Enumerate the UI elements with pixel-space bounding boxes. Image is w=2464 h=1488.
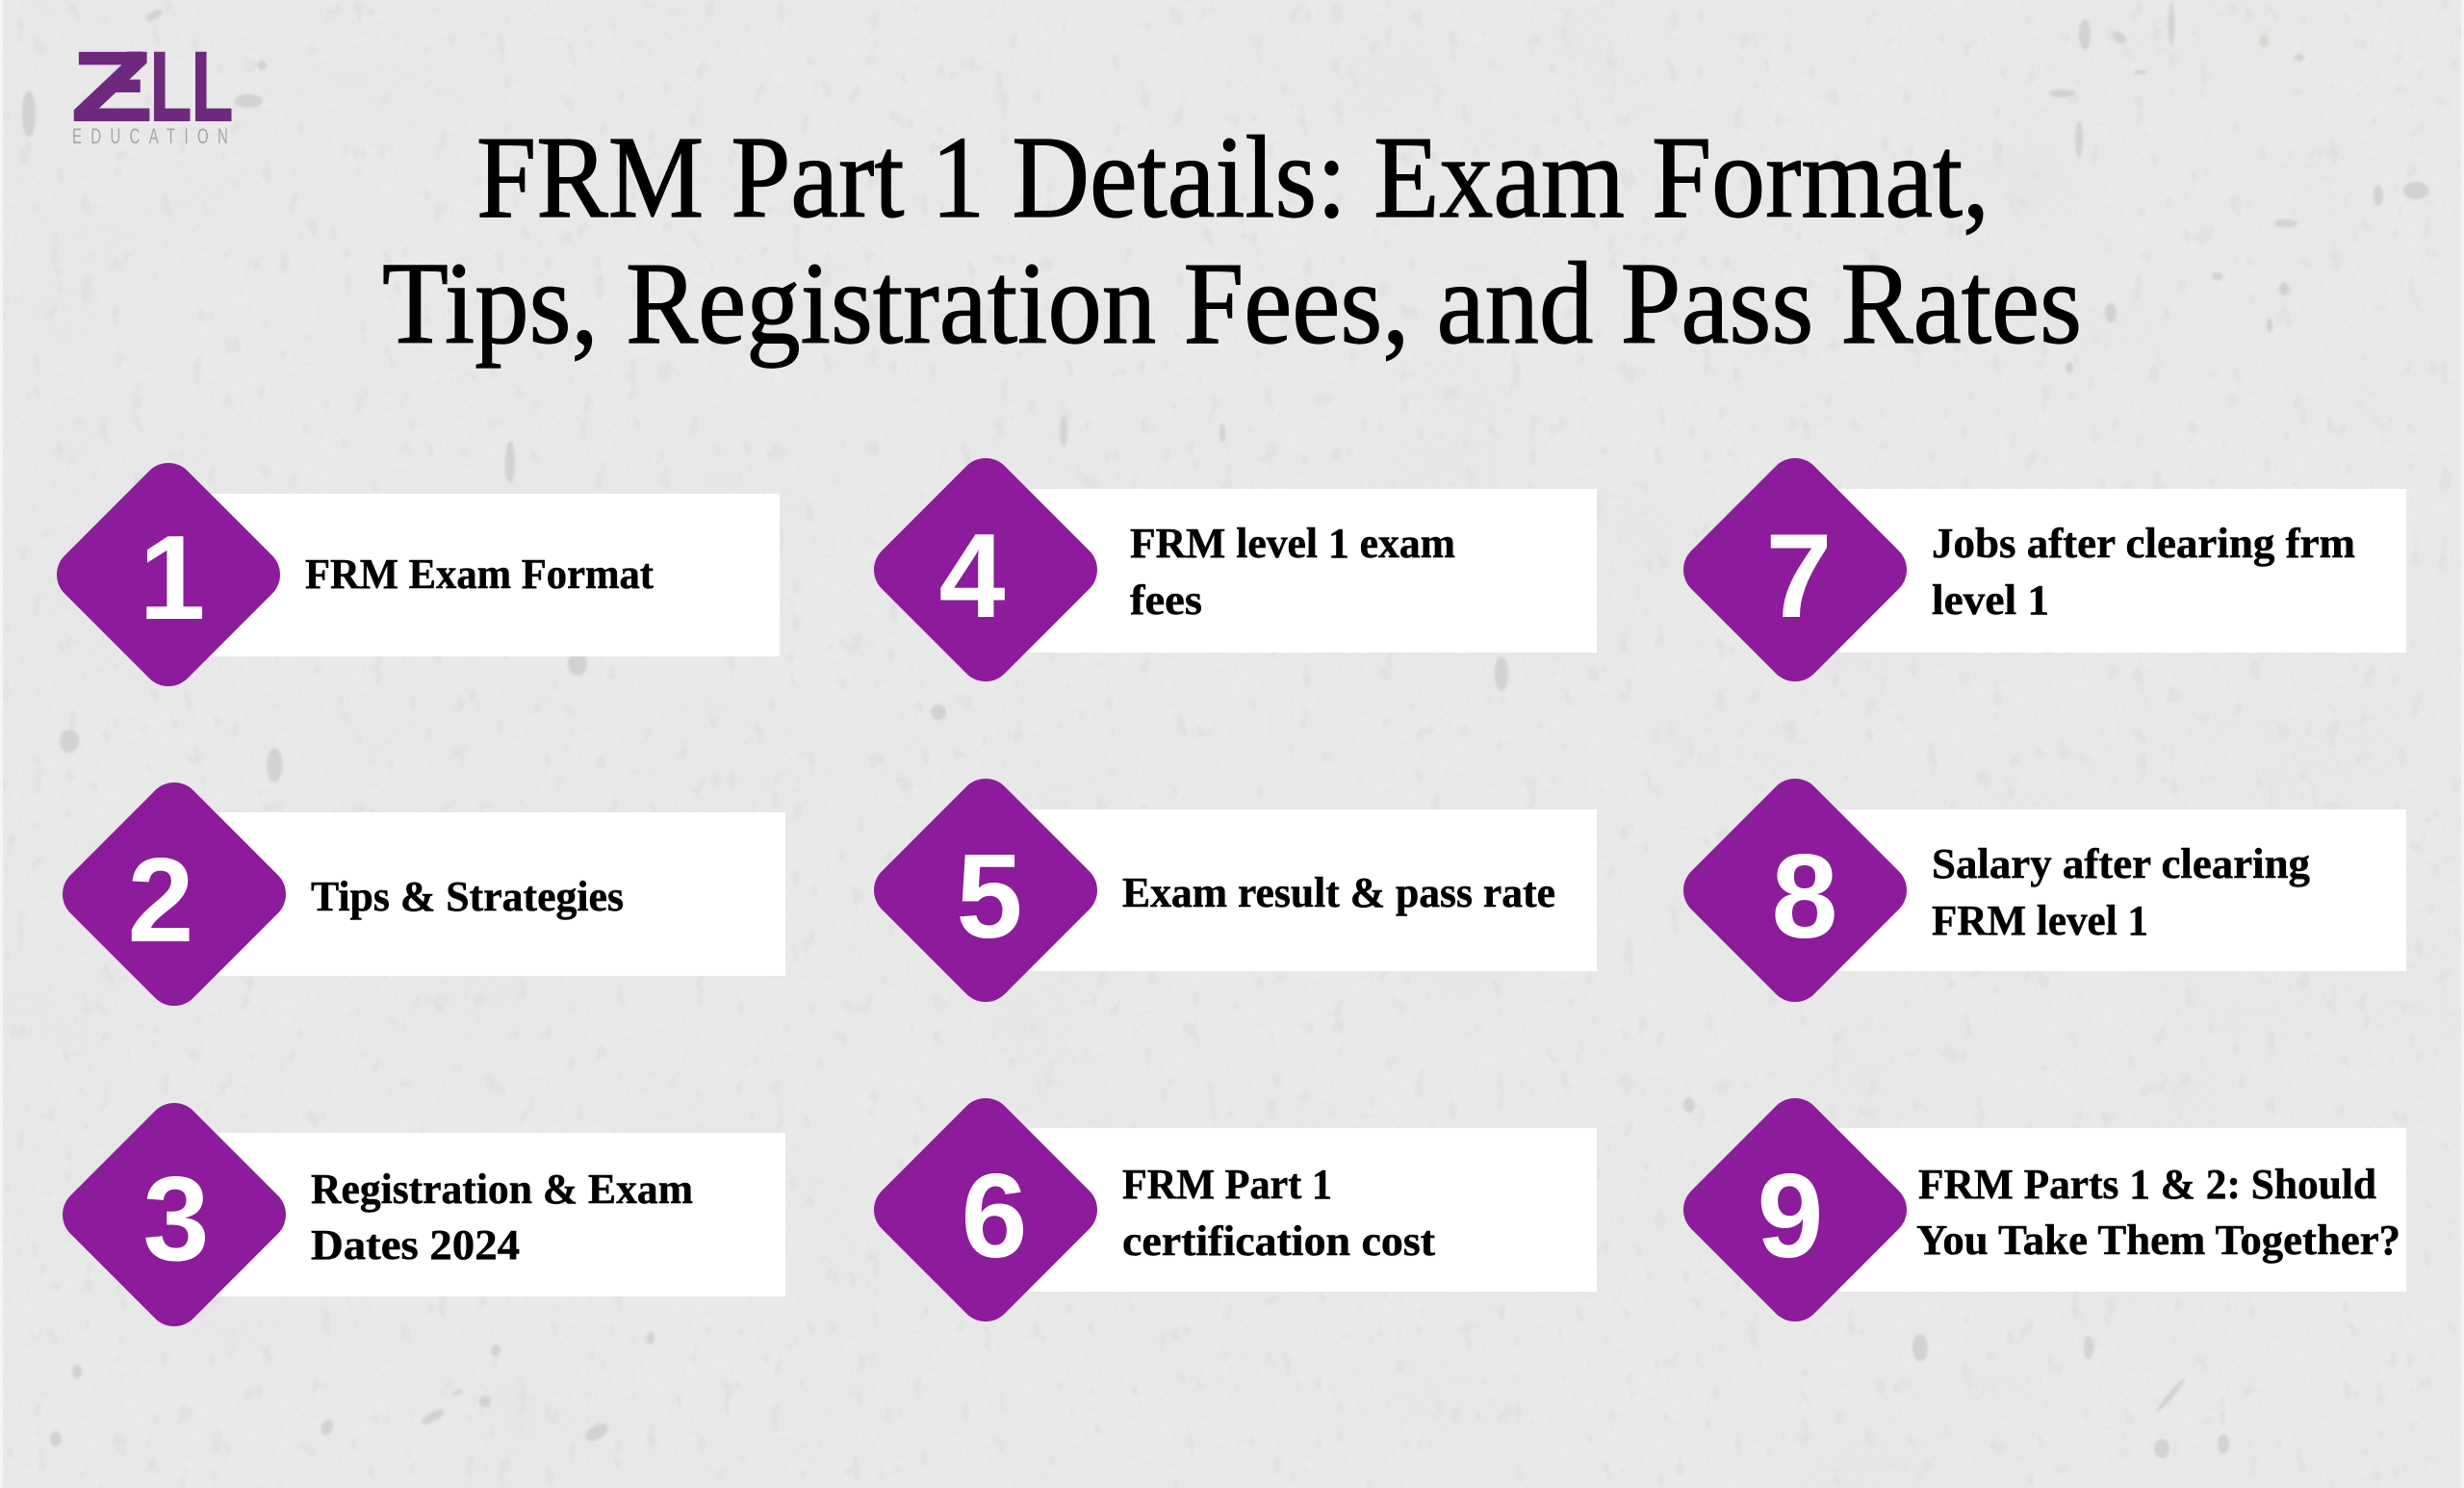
item 1: FRM Exam Format bbox=[57, 463, 780, 686]
item 6: FRM Part 1 certification cost: certification cost bbox=[1122, 1218, 1435, 1265]
item 6: FRM Part 1 certification cost bbox=[874, 1098, 1597, 1321]
item 7: Jobs after clearing frm level 1 bbox=[1683, 458, 2406, 681]
item 5: Exam result & pass rate: Exam result & pass rate bbox=[1122, 869, 1555, 916]
item 1: FRM Exam Format: 1 bbox=[140, 512, 205, 645]
item 1: FRM Exam Format: FRM Exam Format bbox=[305, 551, 654, 598]
item 9: FRM Parts 1 & 2: Should You Take Them Together?: You Take Them Together? bbox=[1916, 1217, 2400, 1264]
item 5: Exam result & pass rate: 5 bbox=[957, 831, 1022, 963]
item 3: Registration & Exam Dates 2024 bbox=[63, 1103, 785, 1326]
item 8: Salary after clearing FRM level 1 bbox=[1683, 779, 2406, 1002]
logo: Zell Education bbox=[73, 52, 231, 143]
item 7: Jobs after clearing frm level 1: level 1 bbox=[1932, 577, 2049, 624]
item 4: FRM level 1 exam fees: FRM level 1 exam bbox=[1130, 520, 1455, 567]
item 4: FRM level 1 exam fees: 4 bbox=[939, 510, 1006, 643]
item 3: Registration & Exam Dates 2024: Registration & Exam bbox=[311, 1166, 693, 1213]
logo: Zell Education: E bbox=[89, 32, 147, 141]
item 8: Salary after clearing FRM level 1: 8 bbox=[1772, 831, 1837, 963]
item 3: Registration & Exam Dates 2024: Dates 2024 bbox=[311, 1221, 520, 1269]
title: FRM Part 1 Details: Exam Format, bbox=[476, 113, 1989, 243]
item 2: Tips & Strategies: Tips & Strategies bbox=[311, 873, 624, 920]
item 9: FRM Parts 1 & 2: Should You Take Them Together? bbox=[1683, 1098, 2406, 1321]
item 6: FRM Part 1 certification cost: FRM Part 1 bbox=[1122, 1161, 1332, 1208]
item 8: Salary after clearing FRM level 1: FRM level 1 bbox=[1932, 897, 2148, 944]
logo: Zell Education: LL bbox=[150, 32, 233, 141]
item 9: FRM Parts 1 & 2: Should You Take Them Together?: 9 bbox=[1758, 1150, 1823, 1283]
item 2: Tips & Strategies bbox=[63, 782, 785, 1006]
item 6: FRM Part 1 certification cost: 6 bbox=[962, 1150, 1027, 1283]
item 4: FRM level 1 exam fees bbox=[874, 458, 1597, 681]
item 3: Registration & Exam Dates 2024: 3 bbox=[143, 1153, 209, 1286]
item 5: Exam result & pass rate bbox=[874, 779, 1597, 1002]
item 2: Tips & Strategies: 2 bbox=[128, 834, 193, 967]
title bbox=[382, 113, 2082, 369]
item 7: Jobs after clearing frm level 1: Jobs after clearing frm bbox=[1932, 520, 2355, 567]
title: Tips, Registration Fees, and Pass Rates bbox=[382, 239, 2082, 369]
item 9: FRM Parts 1 & 2: Should You Take Them Together?: FRM Parts 1 & 2: Should bbox=[1918, 1161, 2376, 1208]
logo: Zell Education: EDUCATION bbox=[72, 124, 228, 148]
item 8: Salary after clearing FRM level 1: Salary after clearing bbox=[1932, 840, 2310, 887]
item 7: Jobs after clearing frm level 1: 7 bbox=[1766, 510, 1832, 643]
logo: Zell Education: Z bbox=[71, 32, 152, 141]
item 4: FRM level 1 exam fees: fees bbox=[1130, 577, 1202, 624]
